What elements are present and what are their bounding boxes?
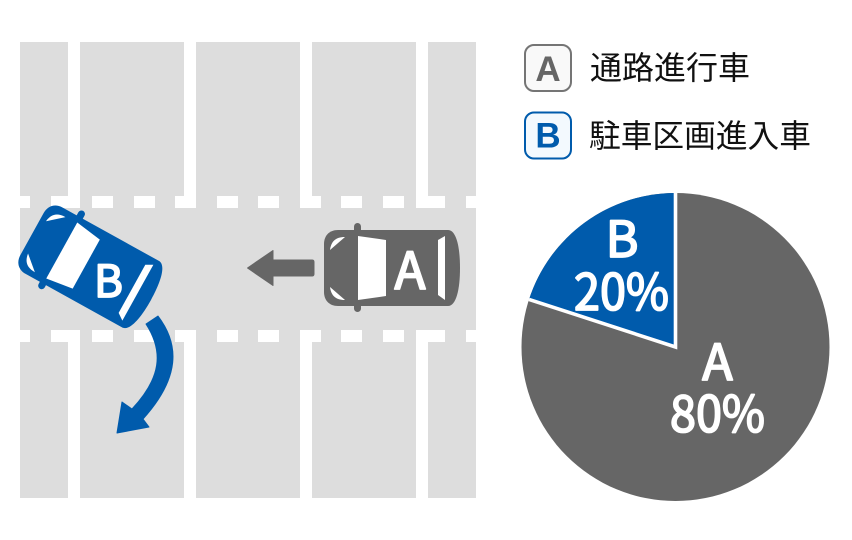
arrow: car A direction [248, 250, 314, 286]
pie label B: B [606, 200, 638, 272]
pie slice A 80% [522, 193, 830, 501]
pie chart [522, 193, 830, 501]
car B [11, 195, 173, 338]
pie label A: 80% [670, 375, 765, 447]
car B label: B [94, 246, 123, 310]
pie label B: 20% [574, 253, 669, 325]
legend badge B: B [535, 116, 561, 156]
parking lot diagram [20, 42, 476, 498]
pie label A [670, 323, 765, 447]
legend item A [525, 45, 750, 91]
car A label: A [394, 230, 426, 304]
legend item B [525, 112, 811, 158]
pie label A: A [702, 323, 733, 395]
legend badge A [525, 45, 571, 91]
legend badge A: A [535, 50, 561, 89]
legend text A: 通路進行車 [590, 50, 750, 86]
legend badge B [525, 112, 571, 158]
legend text B: 駐車区画進入車 [589, 118, 811, 154]
arrow: car B turning into parking space [117, 316, 173, 433]
pie label B [574, 200, 669, 325]
pie slice B 20% [529, 193, 676, 347]
car A [324, 223, 460, 312]
